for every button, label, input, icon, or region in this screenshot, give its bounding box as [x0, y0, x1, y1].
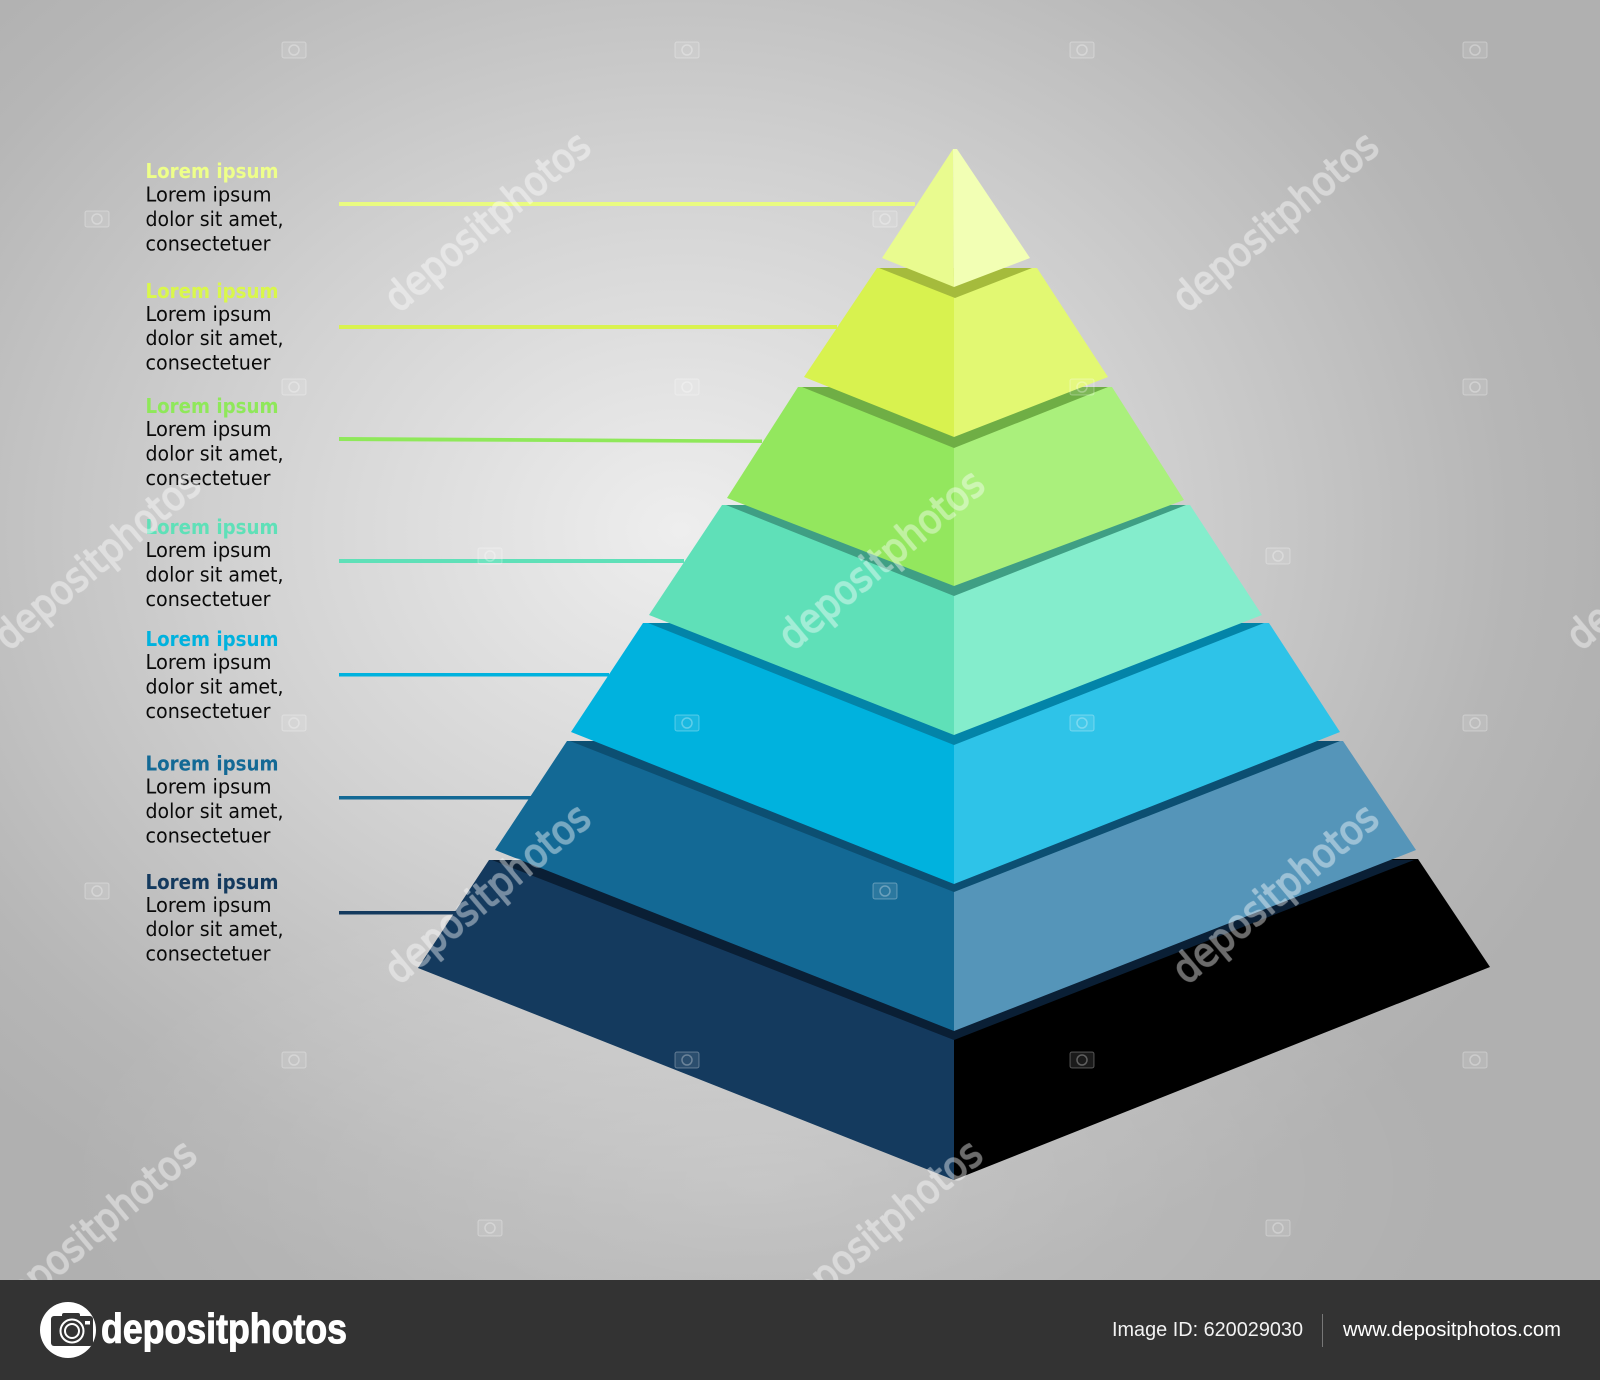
connector: level 3	[339, 437, 762, 443]
footer logo wordmark: depositphotos	[101, 1305, 347, 1352]
label 2	[146, 279, 284, 374]
connector: level 1	[339, 202, 915, 206]
tier 4	[649, 505, 1262, 735]
footer bar	[0, 1280, 1600, 1380]
label 5: consectetuer	[146, 699, 271, 723]
watermark text: depositphotos	[1164, 123, 1388, 321]
tier 6	[495, 741, 1416, 1031]
label 6: dolor sit amet,	[146, 799, 284, 823]
label 1: consectetuer	[146, 232, 271, 256]
tier 5	[571, 623, 1340, 884]
tier 1 apex	[882, 149, 1030, 287]
labels	[146, 159, 284, 966]
pyramid	[418, 149, 1490, 1180]
connector: level 4	[339, 559, 684, 563]
label 5	[146, 627, 284, 723]
connector: level 5	[339, 673, 609, 676]
label 4: Lorem ipsum	[146, 515, 278, 539]
watermark text: depositphotos	[376, 123, 600, 321]
watermark text: depositphotos	[770, 461, 994, 659]
label 7: Lorem ipsum	[146, 893, 272, 917]
connector: level 2	[339, 325, 837, 329]
label 4: consectetuer	[146, 587, 271, 611]
label 6	[146, 752, 284, 848]
label 2: consectetuer	[146, 350, 271, 374]
connector: level 7	[339, 911, 457, 914]
label 2: dolor sit amet,	[146, 326, 284, 350]
label 7: consectetuer	[146, 942, 271, 966]
label 1	[146, 159, 284, 256]
label 7: dolor sit amet,	[146, 917, 284, 941]
footer image id: Image ID: 620029030	[1112, 1319, 1303, 1341]
label 3: consectetuer	[146, 466, 271, 490]
label 7	[146, 870, 284, 966]
label 4: dolor sit amet,	[146, 562, 284, 586]
label 3	[146, 394, 284, 490]
tier 7 base	[418, 859, 1490, 1180]
label 6: Lorem ipsum	[146, 752, 278, 776]
watermark text: depositphotos	[376, 795, 600, 993]
watermark camera icons	[85, 42, 1487, 1236]
label 1: Lorem ipsum	[146, 159, 278, 183]
watermark text: depositphotos	[768, 1131, 992, 1329]
footer logo icon: camera in circle	[40, 1302, 96, 1358]
label 1: dolor sit amet,	[146, 207, 284, 231]
connector: level 6	[339, 796, 531, 800]
label 5: Lorem ipsum	[146, 650, 272, 674]
label 3: Lorem ipsum	[146, 417, 272, 441]
label 7: Lorem ipsum	[146, 870, 278, 894]
label 3: dolor sit amet,	[146, 442, 284, 466]
label 1: Lorem ipsum	[146, 182, 272, 206]
label 2: Lorem ipsum	[146, 279, 278, 303]
label 2: Lorem ipsum	[146, 302, 272, 326]
label 5: Lorem ipsum	[146, 627, 278, 651]
label 3: Lorem ipsum	[146, 394, 278, 418]
tier 3	[727, 387, 1184, 586]
label 6: consectetuer	[146, 824, 271, 848]
footer url: www.depositphotos.com	[1342, 1319, 1561, 1341]
label 6: Lorem ipsum	[146, 774, 272, 798]
label 5: dolor sit amet,	[146, 674, 284, 698]
connector lines	[339, 202, 915, 914]
watermark text: depositphotos	[1164, 795, 1388, 993]
label 4: Lorem ipsum	[146, 538, 272, 562]
tier 2	[804, 268, 1108, 437]
label 4	[146, 515, 284, 611]
